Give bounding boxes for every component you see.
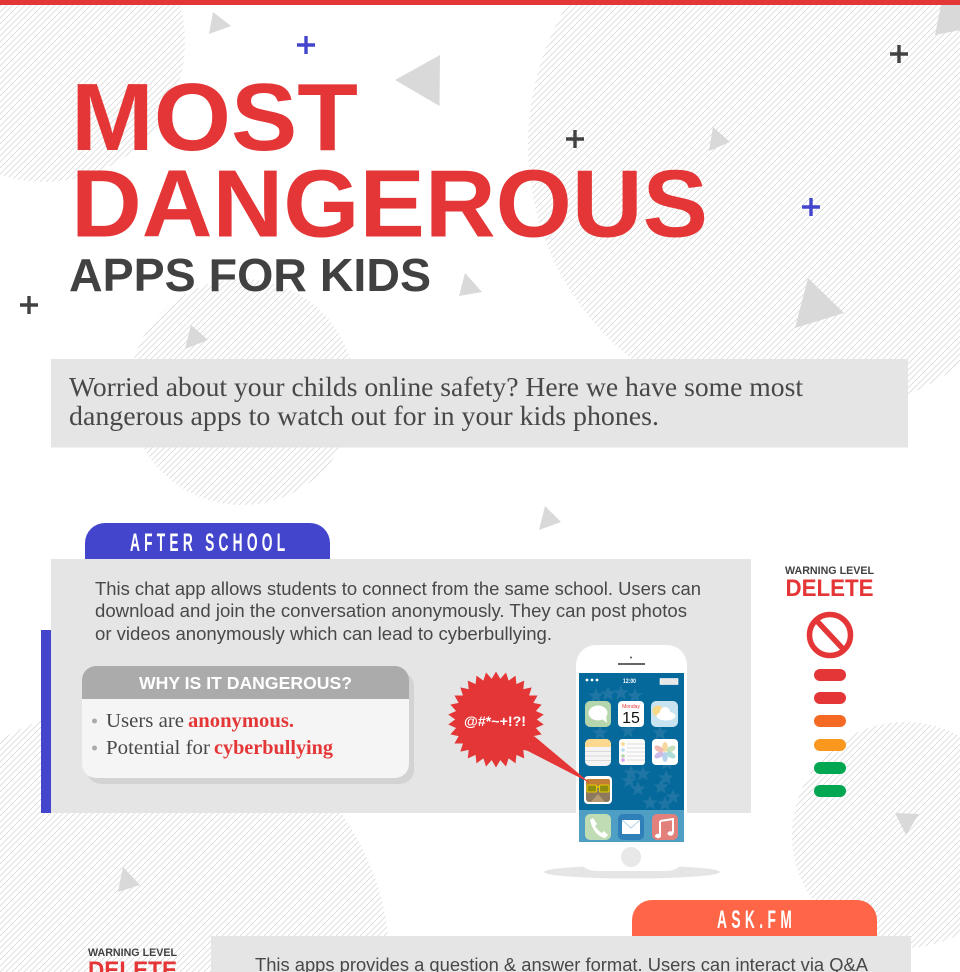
warning level bars (814, 669, 846, 797)
warning level: Ask.fm: WARNING LEVEL (88, 947, 177, 959)
icon: photos (652, 739, 678, 765)
phone shadow (544, 866, 720, 878)
reason bullets: anonymous. (188, 710, 294, 732)
reason bullets (92, 710, 333, 759)
icon: weather (651, 701, 678, 727)
wallpaper stars (588, 685, 681, 810)
icon: mail (618, 814, 644, 840)
After School description (95, 579, 701, 644)
warning level: Ask.fm (88, 947, 177, 972)
icon: phone (585, 814, 611, 840)
icon: notes (585, 739, 611, 766)
Ask.fm panel (211, 936, 911, 972)
title: MOST (71, 64, 358, 171)
icon: calendar: Monday (622, 704, 640, 710)
intro panel: Worried about your childs online safety? Here we have some most (69, 372, 804, 402)
title: DANGEROUS (71, 150, 708, 258)
top red bar (0, 0, 960, 5)
After School panel (51, 559, 751, 813)
icon: messages (585, 701, 611, 727)
icon: music (652, 814, 678, 840)
After School tab (85, 523, 330, 560)
warning level: After School (785, 565, 874, 797)
phone illustration (576, 645, 687, 871)
decorative plus signs (20, 36, 908, 314)
status bar: 12:00 (623, 679, 637, 685)
icon: calendar (618, 701, 644, 727)
callout burst (448, 656, 590, 783)
warning level: After School: WARNING LEVEL (785, 565, 874, 577)
After School description: or videos anonymously which can lead to cyberbullying. (95, 624, 552, 644)
After School blue side bar (41, 630, 51, 813)
Why is it dangerous box: WHY IS IT DANGEROUS? (139, 673, 352, 693)
reason bullets: cyberbullying (214, 737, 333, 759)
After School description: download and join the conversation anonymously. They can post photos (95, 601, 687, 621)
title (69, 64, 708, 301)
Ask.fm tab: ASK.FM (717, 907, 792, 934)
warning level: After School: DELETE (786, 575, 874, 602)
icon: prohibited sign (810, 614, 850, 656)
reason bullets: Potential for (106, 737, 210, 759)
title: APPS FOR KIDS (69, 249, 431, 301)
Why is it dangerous box (82, 666, 414, 784)
icon: After School app (584, 776, 612, 804)
icon: reminders (619, 739, 645, 765)
intro panel: dangerous apps to watch out for in your kids phones. (69, 401, 659, 431)
Ask.fm tab (632, 900, 877, 937)
After School tab: AFTER SCHOOL (130, 530, 285, 557)
callout burst: @#*~+!?! (464, 713, 526, 729)
After School description: This chat app allows students to connect from the same school. Users can (95, 579, 701, 599)
status bar (586, 678, 678, 685)
reason bullets: Users are (106, 710, 184, 732)
intro panel (51, 359, 908, 448)
icon: calendar: 15 (622, 710, 640, 727)
